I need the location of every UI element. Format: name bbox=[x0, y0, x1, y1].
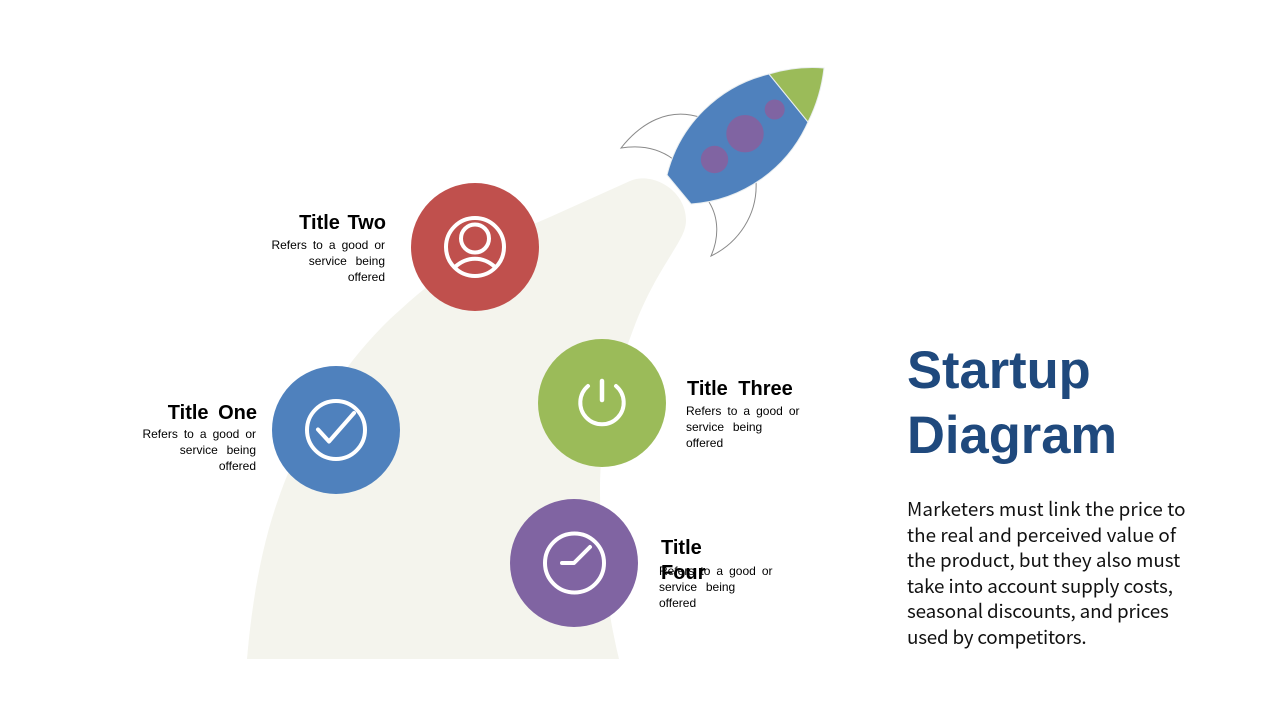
label: title four: Title bbox=[661, 537, 702, 559]
label: title one description: Refers to a good or bbox=[142, 427, 256, 441]
body text: Marketers must link the price to bbox=[907, 495, 1186, 522]
label: title three description bbox=[686, 404, 800, 450]
label: title four description: offered bbox=[659, 596, 696, 610]
body text: the real and perceived value of bbox=[907, 521, 1176, 548]
label: title one description: service being bbox=[180, 443, 256, 457]
label: title three description: service being bbox=[686, 420, 762, 434]
label: title one description: offered bbox=[219, 459, 256, 473]
heading bbox=[907, 341, 1117, 465]
rocket bbox=[621, 68, 824, 256]
heading: Startup bbox=[907, 341, 1091, 400]
label: title four description bbox=[659, 564, 773, 610]
label: title four bbox=[661, 537, 706, 584]
label: title four: Four bbox=[661, 562, 705, 584]
label: title two description bbox=[271, 238, 385, 284]
label: title four description: Refers to a good or bbox=[659, 564, 773, 578]
label: title one description bbox=[142, 427, 256, 473]
label: title two description: offered bbox=[348, 270, 385, 284]
label: title two description: service being bbox=[309, 254, 385, 268]
rocket windows bbox=[701, 100, 785, 173]
label: title four description: service being bbox=[659, 580, 735, 594]
body text: used by competitors. bbox=[907, 623, 1086, 650]
circle four with clock icon bbox=[510, 499, 638, 627]
rocket body bbox=[667, 74, 808, 204]
label: title two: Title Two bbox=[299, 212, 386, 234]
label: title three description: Refers to a good or bbox=[686, 404, 800, 418]
circle one with check icon bbox=[272, 366, 400, 494]
label: title one: Title One bbox=[168, 402, 257, 424]
rocket right fin bbox=[709, 181, 756, 256]
body text: take into account supply costs, bbox=[907, 572, 1173, 599]
heading: Diagram bbox=[907, 406, 1117, 465]
circle two with person icon bbox=[411, 183, 539, 311]
body text bbox=[907, 495, 1186, 650]
body text: the product, but they also must bbox=[907, 546, 1180, 573]
body text: seasonal discounts, and prices bbox=[907, 597, 1169, 624]
label: title three description: offered bbox=[686, 436, 723, 450]
circle three with power icon bbox=[538, 339, 666, 467]
rocket nose bbox=[769, 68, 824, 122]
label: title three: Title Three bbox=[687, 378, 793, 400]
rocket left fin bbox=[621, 114, 702, 159]
label: title two description: Refers to a good or bbox=[271, 238, 385, 252]
rising path shape bbox=[247, 178, 686, 659]
